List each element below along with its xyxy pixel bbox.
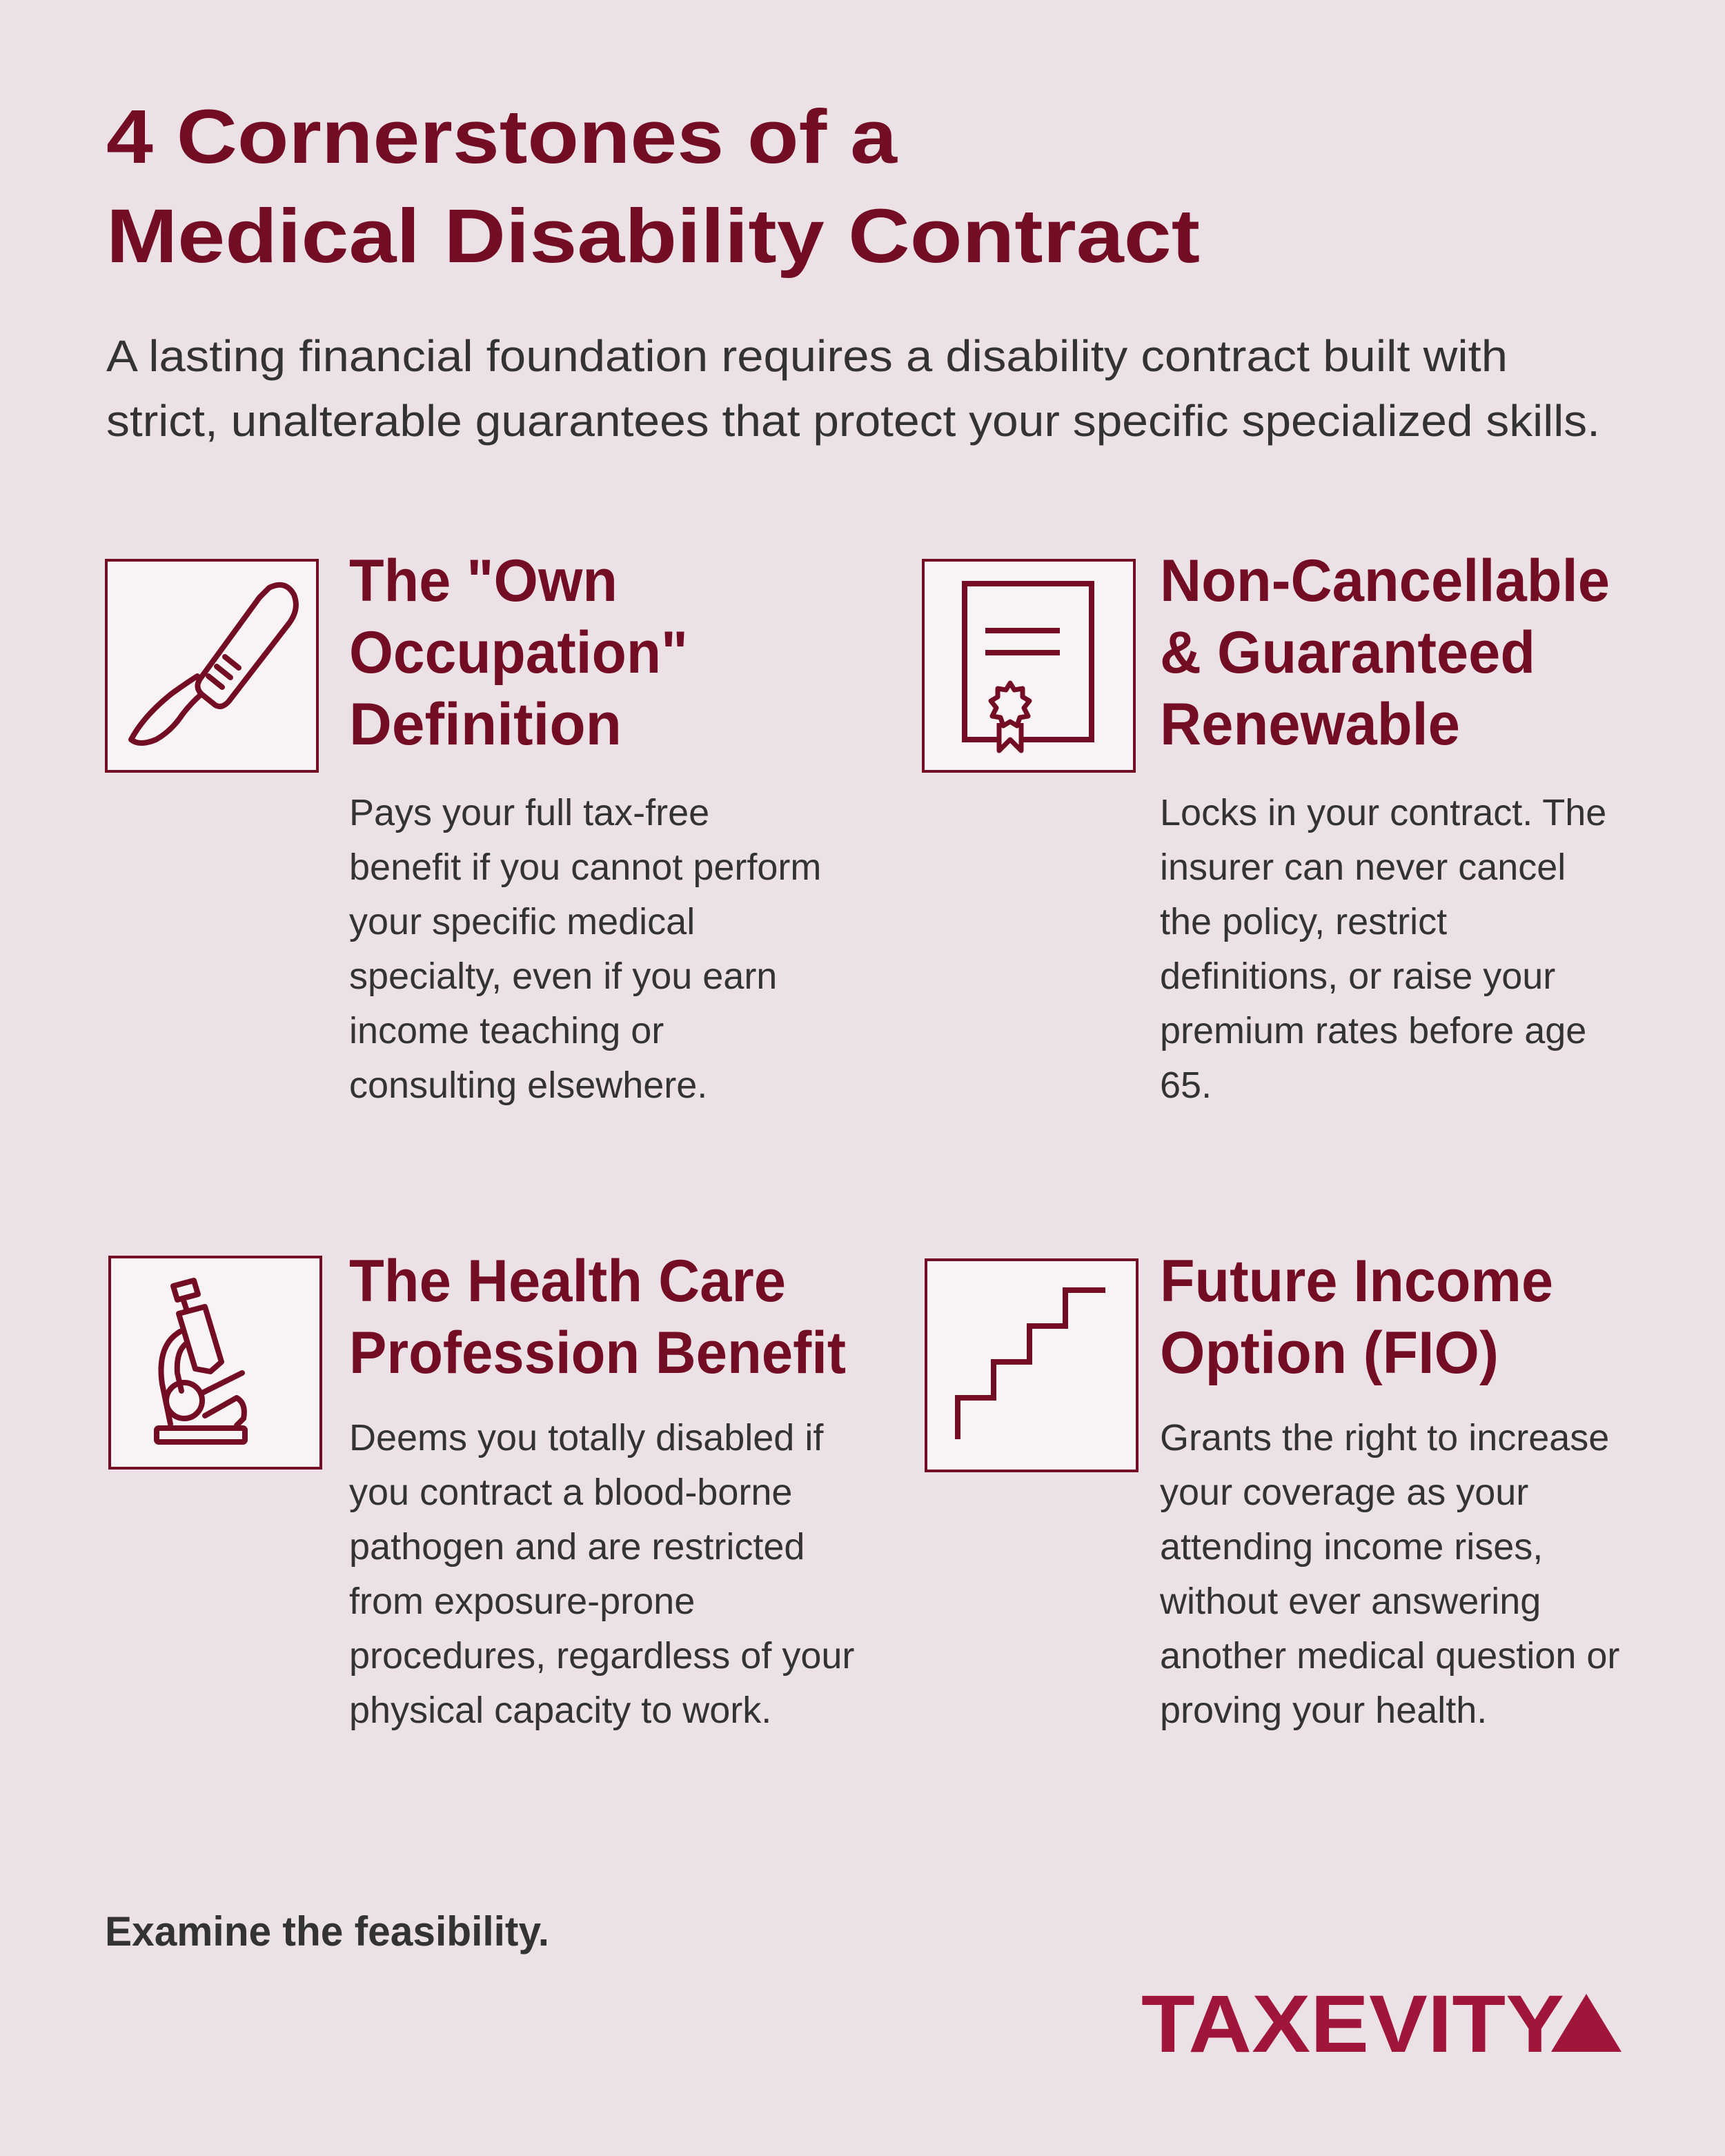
body text <box>349 792 821 1106</box>
subtitle: strict, unalterable guarantees that protect your specific specialized skills. <box>106 396 1600 446</box>
body text: without ever answering <box>1159 1581 1541 1622</box>
heading: Profession Benefit <box>349 1320 846 1386</box>
heading <box>1160 1248 1553 1386</box>
body text: Deems you totally disabled if <box>349 1417 824 1458</box>
body text: physical capacity to work. <box>349 1690 771 1731</box>
body text: premium rates before age <box>1160 1010 1586 1051</box>
body text: your coverage as your <box>1160 1472 1528 1513</box>
heading: Renewable <box>1160 691 1460 758</box>
subtitle: A lasting financial foundation requires a disability contract built with <box>106 331 1508 381</box>
icon: microscope <box>110 1257 321 1468</box>
body text: attending income rises, <box>1160 1526 1543 1567</box>
body text: consulting elsewhere. <box>349 1065 707 1106</box>
title: Medical Disability Contract <box>106 194 1200 279</box>
title <box>106 95 1200 279</box>
logo: TAXEVITY <box>1141 1979 1564 2070</box>
body text: benefit if you cannot perform <box>349 847 821 888</box>
subtitle <box>106 331 1600 446</box>
heading: The Health Care <box>349 1248 786 1314</box>
heading: Occupation" <box>349 620 688 686</box>
body text: procedures, regardless of your <box>349 1635 854 1677</box>
body text <box>1160 792 1606 1106</box>
title: 4 Cornerstones of a <box>106 95 898 179</box>
body text: from exposure-prone <box>349 1581 695 1622</box>
panel: health care profession benefit <box>110 1248 854 1731</box>
heading: & Guaranteed <box>1160 620 1535 686</box>
body text: Pays your full tax-free <box>349 792 709 833</box>
body text: insurer can never cancel <box>1160 847 1566 888</box>
heading <box>349 1248 846 1386</box>
body text <box>349 1417 854 1731</box>
body text: pathogen and are restricted <box>349 1526 805 1567</box>
body text: Locks in your contract. The <box>1160 792 1606 833</box>
heading: Option (FIO) <box>1160 1320 1499 1386</box>
heading: Non-Cancellable <box>1160 548 1610 614</box>
heading: The "Own <box>349 548 618 614</box>
panel: own occupation <box>106 548 821 1106</box>
footer text: Examine the feasibility. <box>105 1908 549 1955</box>
body text: proving your health. <box>1160 1690 1487 1731</box>
body text: income teaching or <box>349 1010 664 1051</box>
heading <box>1160 548 1610 758</box>
icon: stairs <box>926 1260 1137 1471</box>
body text: another medical question or <box>1160 1635 1619 1677</box>
icon: certificate <box>923 560 1134 771</box>
heading: Definition <box>349 691 622 758</box>
icon: scalpel <box>106 560 317 771</box>
body text <box>1159 1417 1619 1731</box>
body text: your specific medical <box>349 901 695 942</box>
panel: non-cancellable <box>923 548 1610 1106</box>
body text: definitions, or raise your <box>1160 956 1555 997</box>
body text: the policy, restrict <box>1160 901 1447 942</box>
body text: you contract a blood-borne <box>349 1472 792 1513</box>
body text: 65. <box>1160 1065 1212 1106</box>
body text: specialty, even if you earn <box>349 956 777 997</box>
body text: Grants the right to increase <box>1160 1417 1609 1458</box>
panel: future income option <box>926 1248 1619 1731</box>
heading <box>349 548 688 758</box>
heading: Future Income <box>1160 1248 1553 1314</box>
